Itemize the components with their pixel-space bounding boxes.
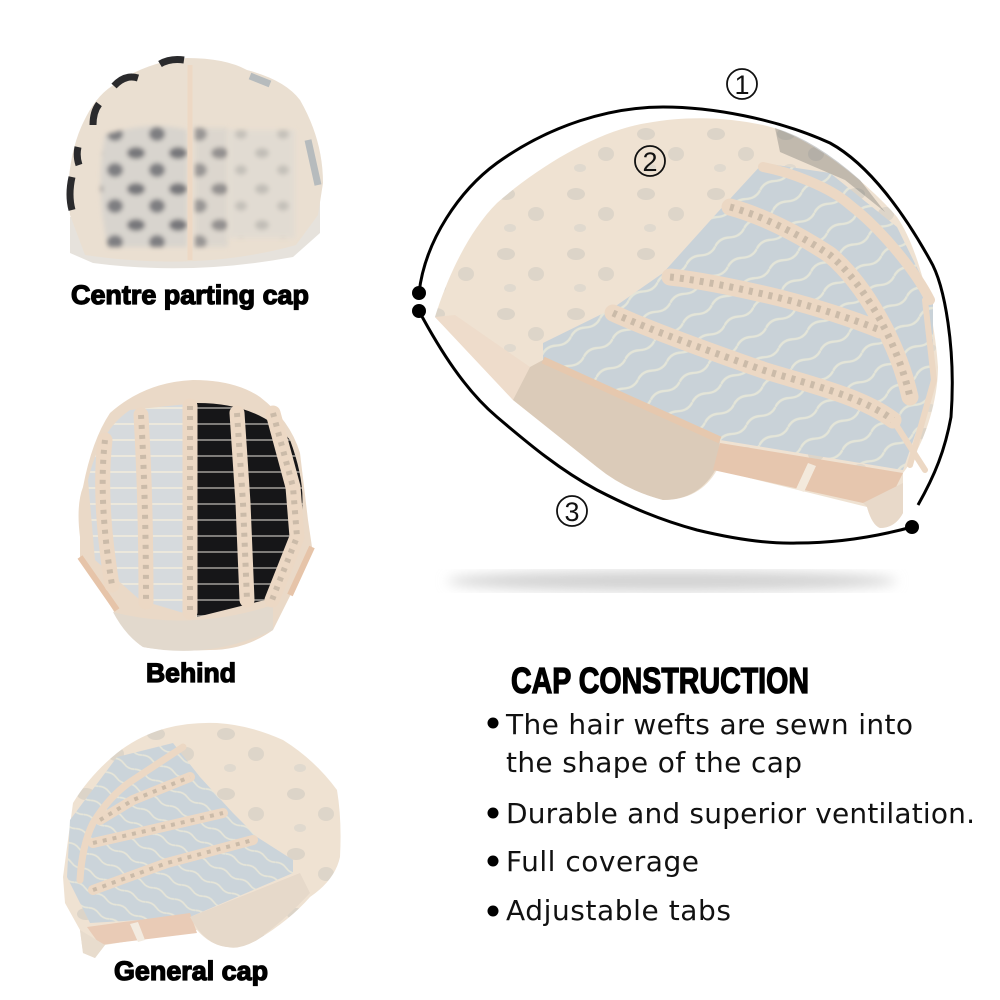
number label 2: 2 [642,147,658,177]
arc bracket: bottom [419,311,912,543]
caption: behind: Behind [146,658,236,688]
number label 1 [727,69,757,100]
bullet list: the shape of the cap [506,746,802,779]
number label 3: 3 [564,497,580,527]
number label 2 [635,146,665,177]
number label 1: 1 [734,70,750,100]
main cap photo [435,118,938,528]
number label 3 [557,496,587,527]
centre parting cap [68,58,323,268]
arc bracket: top [419,107,952,505]
bullet list: The hair wefts are sewn into [505,708,913,741]
bullet list: Full coverage [506,845,699,878]
bullet list [488,708,975,927]
bullet list: Adjustable tabs [506,894,731,927]
heading: CAP CONSTRUCTION [511,660,809,701]
behind cap [79,380,312,651]
caption: general cap: General cap [114,956,268,986]
general cap [63,723,341,958]
bullet list: Durable and superior ventilation. [506,797,975,830]
ground shadow [447,571,897,591]
marker dots [412,286,919,534]
caption: centre parting cap: Centre parting cap [71,280,309,310]
